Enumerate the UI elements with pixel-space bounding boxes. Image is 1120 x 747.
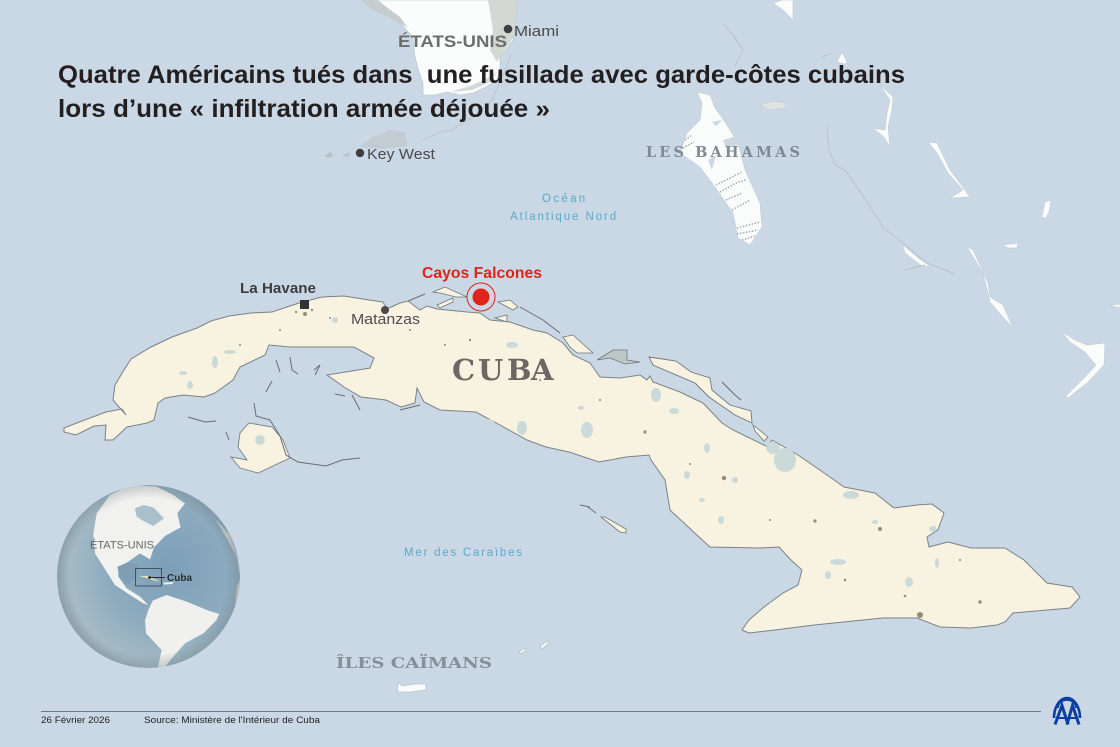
footer rule bbox=[41, 711, 1041, 712]
island: Abaco bbox=[773, 0, 793, 20]
marker: Matanzas: Matanzas bbox=[351, 311, 420, 328]
island texture: Andros creeks bbox=[683, 135, 760, 240]
coastal reefs bbox=[188, 294, 741, 513]
continent: South America bbox=[145, 595, 219, 673]
globe label: Cuba: Cuba bbox=[167, 572, 192, 584]
label: Cuba: CUBA bbox=[452, 353, 554, 387]
water: Gulf shelf bbox=[117, 563, 140, 585]
label: Iles Caimans: ÎLES CAÏMANS bbox=[336, 653, 492, 672]
water: Hudson Bay bbox=[135, 505, 164, 526]
island: Long Island bbox=[967, 247, 1013, 328]
marker: La Havane bbox=[240, 281, 316, 309]
footer: source: Source: Ministère de l'Intérieur de Cuba bbox=[144, 715, 320, 725]
title: lors d’une « infiltration armée déjouée » bbox=[58, 95, 550, 123]
leader line bbox=[148, 576, 165, 579]
label: Ocean Atlantique Nord bbox=[510, 193, 617, 223]
islands: Cuba on globe bbox=[139, 576, 161, 581]
reef lines bbox=[723, 23, 955, 274]
landmass: Bahamas bbox=[680, 0, 1120, 398]
title bbox=[58, 61, 905, 123]
island: San Salvador bbox=[1042, 200, 1051, 218]
island: Bimini group bbox=[760, 101, 786, 110]
island: Isla de la Juventud bbox=[231, 423, 290, 473]
continent: Greenland and Africa edge bbox=[215, 518, 240, 606]
marker: La Havane: La Havane bbox=[240, 281, 316, 297]
islands: Hispaniola bbox=[163, 582, 174, 585]
marker: Cayos Falcones bbox=[467, 283, 495, 311]
globe label: Etats-Unis: ÉTATS-UNIS bbox=[90, 538, 154, 552]
label: Etats-Unis: ÉTATS-UNIS bbox=[398, 32, 507, 51]
logo: Anadolu Agency bbox=[1054, 698, 1080, 724]
lakes and urban specks bbox=[179, 317, 939, 587]
label: Cayos Falcones: Cayos Falcones bbox=[422, 265, 542, 282]
island: Nassau bbox=[837, 52, 847, 64]
island: Cat Island bbox=[928, 142, 970, 198]
cays: small eastern bbox=[753, 425, 768, 441]
continent: North America bbox=[93, 485, 185, 605]
landmass: Florida bbox=[325, 0, 517, 158]
island: Mayaguana bbox=[1003, 243, 1018, 248]
island: Cuba main bbox=[64, 296, 1080, 633]
island: Eleuthera bbox=[873, 85, 893, 147]
landmass: Cuba bbox=[64, 287, 1080, 633]
marker: Miami: Miami bbox=[514, 23, 559, 40]
locator box bbox=[136, 568, 162, 586]
island lakes: Andros bbox=[708, 120, 738, 170]
label: Les Bahamas: LES BAHAMAS bbox=[646, 144, 800, 161]
cays: Sur bbox=[601, 517, 626, 533]
title: Quatre Américains tués dans une fusillade avec garde-côtes cubains bbox=[58, 61, 905, 89]
island: Andros bbox=[680, 92, 762, 245]
label: Ocean Atlantique Nord: Atlantique Nord bbox=[510, 211, 617, 223]
landmass: Cayman Islands bbox=[397, 641, 549, 692]
locator globe bbox=[57, 485, 240, 673]
cays: Sabana archipelago bbox=[433, 287, 640, 364]
cays: Jardines del Rey bbox=[649, 357, 752, 423]
island: Inagua bbox=[1062, 332, 1105, 398]
label: Mer des Caraibes: Mer des Caraïbes bbox=[404, 547, 522, 559]
label: Ocean Atlantique Nord: Océan bbox=[542, 193, 586, 205]
footer: date: 26 Février 2026 bbox=[41, 715, 110, 725]
marker: Key West: Key West bbox=[367, 146, 436, 163]
island: Exuma chain bbox=[903, 245, 930, 266]
